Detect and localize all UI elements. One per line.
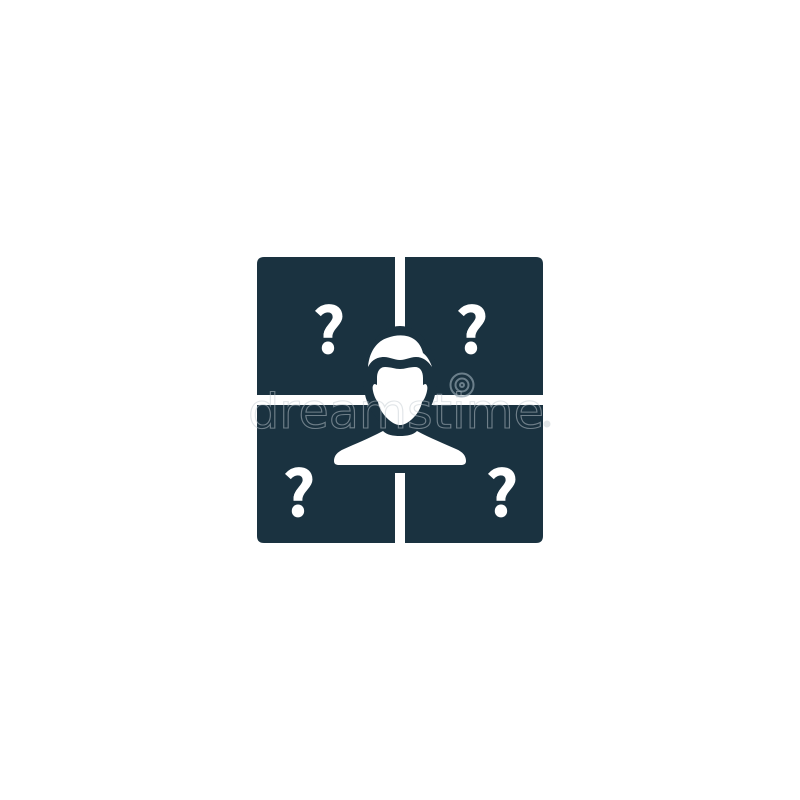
question mark: top left: ? xyxy=(313,281,345,372)
icon: dark halo behind person xyxy=(363,326,437,473)
panel: four-square grid xyxy=(257,257,543,543)
watermark dot xyxy=(544,420,550,428)
shoulders xyxy=(334,431,466,465)
icon: person xyxy=(334,335,466,465)
question mark: top right: ? xyxy=(456,281,488,372)
watermark spiral logo xyxy=(450,374,474,396)
hair xyxy=(368,335,432,367)
question mark: bottom left: ? xyxy=(283,444,315,535)
question mark: bottom right: ? xyxy=(486,444,518,535)
watermark text: dreamstime xyxy=(248,384,544,440)
face xyxy=(373,367,427,425)
